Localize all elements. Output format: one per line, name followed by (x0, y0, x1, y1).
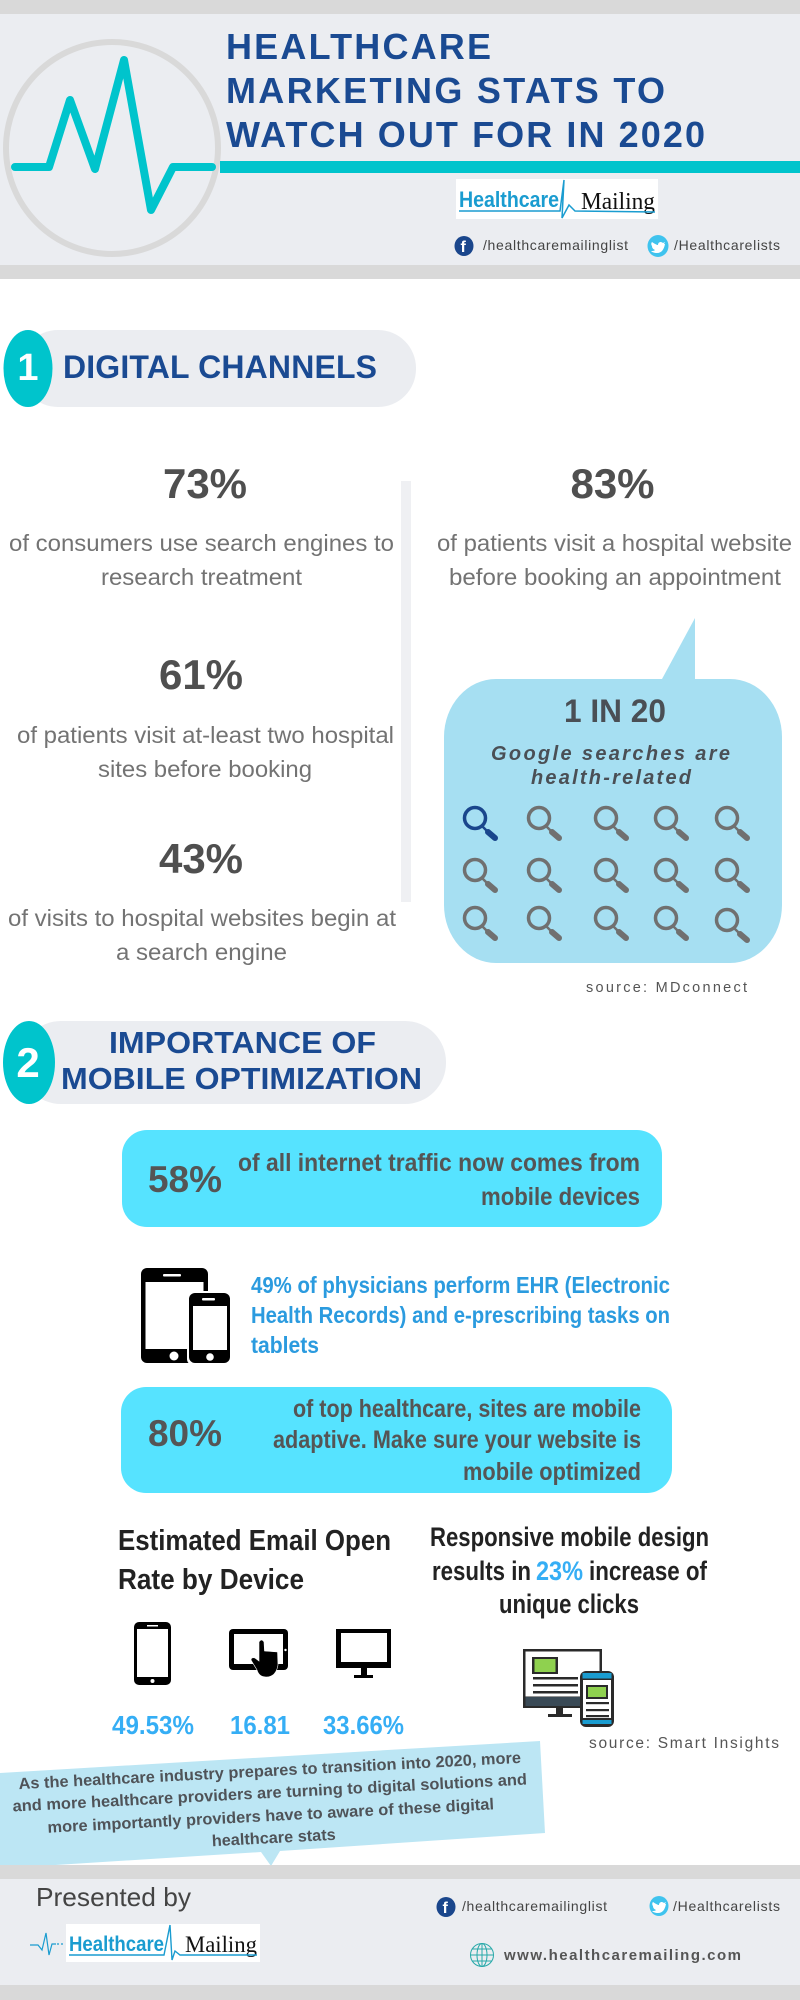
text: responsive mobile design: unique clicks (499, 1589, 639, 1619)
title (226, 26, 705, 155)
header rule (220, 161, 800, 173)
callout: closing note banner: healthcare stats (211, 1827, 336, 1850)
stat: 83%: 83% (570, 460, 655, 507)
stat: 61% (17, 651, 394, 782)
social: facebook: f (460, 239, 466, 256)
title: WATCH OUT FOR IN 2020 (226, 114, 705, 155)
social: facebook (454, 236, 628, 256)
callout: closing note banner: As the healthcare industry prepares to transition into 2020, more (18, 1750, 521, 1793)
callout: 80% mobile adaptive: adaptive. Make sure your website is (273, 1426, 641, 1454)
stat: 61%: 61% (159, 651, 243, 698)
stat: 73% (9, 460, 394, 590)
stat: 61%: sites before booking (98, 756, 312, 782)
callout: closing note banner (0, 1741, 545, 1866)
section 2 heading (3, 1021, 446, 1104)
social: footer twitter: /Healthcarelists (673, 1898, 780, 1914)
email open rate values (112, 1710, 404, 1740)
source: Smart Insights: source: Smart Insights (589, 1735, 779, 1752)
logo: Healthcare Mailing: Mailing (581, 189, 655, 215)
stat: 83% (437, 460, 792, 590)
callout: closing note banner: and more healthcare providers are turning to digital solutions and (12, 1772, 527, 1815)
icon: globe (470, 1944, 494, 1966)
callout: 80% mobile adaptive: of top healthcare, sites are mobile (293, 1395, 641, 1423)
social: footer twitter (650, 1896, 780, 1916)
callout: 58% mobile traffic: mobile devices (481, 1183, 640, 1211)
callout: 58% mobile traffic: 58% (148, 1159, 222, 1200)
heading: email open rate: Rate by Device (118, 1564, 304, 1596)
heading: email open rate: Estimated Email Open (118, 1525, 391, 1557)
email open rate values: 16.81 (230, 1710, 290, 1740)
text: physicians on tablets: tablets (251, 1332, 319, 1358)
stat: 43%: 43% (159, 835, 243, 882)
callout: 58% mobile traffic (122, 1130, 662, 1227)
icon: smartphone (134, 1622, 171, 1685)
text: responsive mobile design: 23% (536, 1556, 583, 1586)
social: twitter: /Healthcarelists (674, 237, 780, 253)
text: responsive mobile design (430, 1522, 709, 1619)
logo: Healthcare Mailing: Healthcare (459, 187, 559, 212)
source: MDconnect: source: MDconnect (586, 980, 747, 996)
icon: tablet and phone (141, 1268, 232, 1365)
section 1 heading (4, 330, 416, 407)
text: physicians on tablets: Health Records) and e-prescribing tasks on (251, 1302, 670, 1328)
title: HEALTHCARE (226, 26, 491, 67)
footer panel (0, 1865, 800, 2000)
stat: 83%: before booking an appointment (449, 564, 782, 590)
stat: 73%: 73% (163, 460, 247, 507)
email open rate values: 49.53% (112, 1710, 194, 1740)
logo: footer Healthcare Mailing: Healthcare (69, 1933, 164, 1956)
section 2 heading: MOBILE OPTIMIZATION (61, 1061, 422, 1096)
header panel (0, 0, 800, 279)
icon: responsive devices (523, 1649, 614, 1727)
social: footer facebook: f (442, 1900, 448, 1917)
callout: 1 in 20 speech bubble: Google searches are (491, 743, 730, 765)
callout: 58% mobile traffic: of all internet traffic now comes from (238, 1149, 640, 1177)
callout: 1 in 20 speech bubble (444, 618, 782, 963)
divider (401, 481, 411, 902)
section 2 heading: IMPORTANCE OF (109, 1025, 376, 1060)
stat: 43%: a search engine (116, 939, 287, 965)
title: MARKETING STATS TO (226, 70, 665, 111)
text: physicians on tablets (251, 1272, 670, 1358)
stat: 43% (8, 835, 397, 965)
logo: footer Healthcare Mailing (30, 1924, 260, 1962)
social: facebook: /healthcaremailinglist (483, 237, 628, 253)
social: footer facebook: /healthcaremailinglist (462, 1898, 607, 1914)
heading: email open rate (118, 1525, 391, 1596)
callout: 80% mobile adaptive: 80% (148, 1413, 222, 1454)
stat: 43%: of visits to hospital websites begin at (8, 905, 397, 931)
logo: footer Healthcare Mailing: Mailing (185, 1932, 257, 1957)
text: website url: www.healthcaremailing.com (503, 1947, 741, 1964)
text: responsive mobile design: increase of (589, 1556, 708, 1586)
text: presented by: Presented by (36, 1882, 191, 1912)
section 2 heading: 2 (16, 1039, 40, 1086)
stat: 83%: of patients visit a hospital website (437, 530, 792, 556)
email open rate values: 33.66% (323, 1710, 404, 1740)
stat: 61%: of patients visit at-least two hospital (17, 722, 394, 748)
social: twitter (648, 235, 780, 257)
callout: 1 in 20 speech bubble: health-related (531, 767, 692, 789)
social: footer facebook (436, 1897, 607, 1917)
icon: heartbeat circle (6, 42, 218, 254)
icons: magnifying glasses (464, 808, 747, 940)
callout: closing note banner: more importantly providers have to aware of these digital (47, 1796, 494, 1837)
stat: 73%: of consumers use search engines to (9, 530, 394, 556)
text: responsive mobile design: results in (432, 1556, 531, 1586)
stat: 73%: research treatment (101, 564, 303, 590)
logo: Healthcare Mailing (456, 179, 658, 219)
callout: 80% mobile adaptive: mobile optimized (463, 1458, 641, 1486)
section 1 heading: 1 (17, 347, 39, 389)
text: physicians on tablets: 49% of physicians perform EHR (Electronic (251, 1272, 670, 1298)
section 1 heading: DIGITAL CHANNELS (63, 349, 377, 385)
callout: 80% mobile adaptive (121, 1387, 672, 1493)
icon: tablet with hand (229, 1629, 288, 1677)
callout: 1 in 20 speech bubble: 1 IN 20 (564, 693, 666, 729)
text: responsive mobile design: Responsive mobile design (430, 1522, 709, 1552)
icon: desktop monitor (336, 1629, 391, 1678)
